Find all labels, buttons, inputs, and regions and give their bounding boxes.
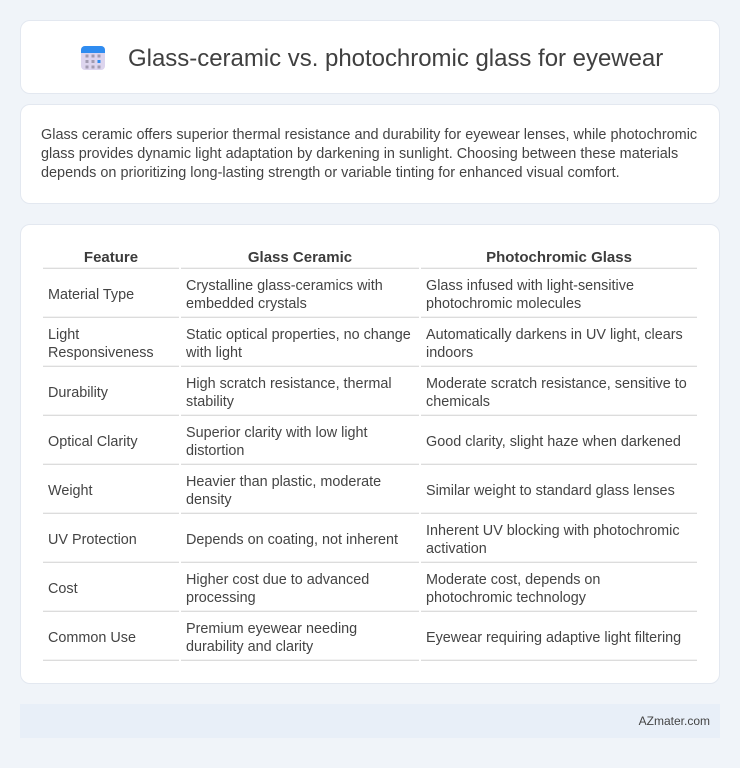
row: durability: Durability xyxy=(48,385,108,401)
row: light responsiveness: Light xyxy=(48,327,79,343)
comparison table: with light xyxy=(186,345,242,361)
comparison table: Similar weight to standard glass lenses xyxy=(426,483,675,499)
comparison table: photochromic technology xyxy=(426,590,586,606)
column heading: glass ceramic: Glass Ceramic xyxy=(248,249,352,266)
comparison table: stability xyxy=(186,394,234,410)
row: weight: Weight xyxy=(48,483,93,499)
comparison table: activation xyxy=(426,541,487,557)
comparison table: Moderate scratch resistance, sensitive to xyxy=(426,376,687,392)
comparison table: processing xyxy=(186,590,256,606)
comparison table: Static optical properties, no change xyxy=(186,327,411,343)
comparison table: Heavier than plastic, moderate xyxy=(186,474,381,490)
comparison table xyxy=(43,249,697,661)
comparison table: Superior clarity with low light xyxy=(186,425,368,441)
row: material type: Material Type xyxy=(48,287,134,303)
row: common use: Common Use xyxy=(48,630,136,646)
comparison table: Higher cost due to advanced xyxy=(186,572,369,588)
column heading: photochromic glass: Photochromic Glass xyxy=(486,249,632,266)
footer credit: AZmater.com xyxy=(639,714,710,728)
comparison table: durability and clarity xyxy=(186,639,313,655)
comparison table: indoors xyxy=(426,345,473,361)
row: light responsiveness xyxy=(48,327,154,361)
comparison table: Premium eyewear needing xyxy=(186,621,357,637)
column heading: feature: Feature xyxy=(84,249,138,266)
comparison table: Eyewear requiring adaptive light filtering xyxy=(426,630,681,646)
comparison table: density xyxy=(186,492,232,508)
icon: calendar xyxy=(81,46,105,70)
row: uv protection: UV Protection xyxy=(48,532,137,548)
summary text: Glass ceramic offers superior thermal resistance and durability for eyewear lenses, while photochromic xyxy=(41,127,697,143)
comparison table: Automatically darkens in UV light, clears xyxy=(426,327,683,343)
row: cost: Cost xyxy=(48,581,78,597)
comparison table: Glass infused with light-sensitive xyxy=(426,278,634,294)
comparison table: Depends on coating, not inherent xyxy=(186,532,398,548)
row: optical clarity: Optical Clarity xyxy=(48,434,138,450)
footer bar xyxy=(20,704,720,738)
summary text xyxy=(41,127,697,181)
comparison table: Inherent UV blocking with photochromic xyxy=(426,523,680,539)
table card xyxy=(20,224,720,684)
comparison table: Good clarity, slight haze when darkened xyxy=(426,434,681,450)
title: Glass-ceramic vs. photochromic glass for eyewear xyxy=(128,45,663,72)
comparison table: embedded crystals xyxy=(186,296,307,312)
title card xyxy=(20,20,720,94)
row: light responsiveness: Responsiveness xyxy=(48,345,154,361)
summary text: glass provides dynamic light adaptation by darkening in sunlight. Choosing between these materials xyxy=(41,146,678,162)
comparison table: chemicals xyxy=(426,394,490,410)
summary text: depends on prioritizing long-lasting strength or variable tinting for enhanced visual comfort. xyxy=(41,165,620,181)
comparison table: photochromic molecules xyxy=(426,296,581,312)
comparison table: Crystalline glass-ceramics with xyxy=(186,278,383,294)
summary card xyxy=(20,104,720,204)
comparison table: Moderate cost, depends on xyxy=(426,572,600,588)
comparison table: distortion xyxy=(186,443,244,459)
comparison table: High scratch resistance, thermal xyxy=(186,376,392,392)
